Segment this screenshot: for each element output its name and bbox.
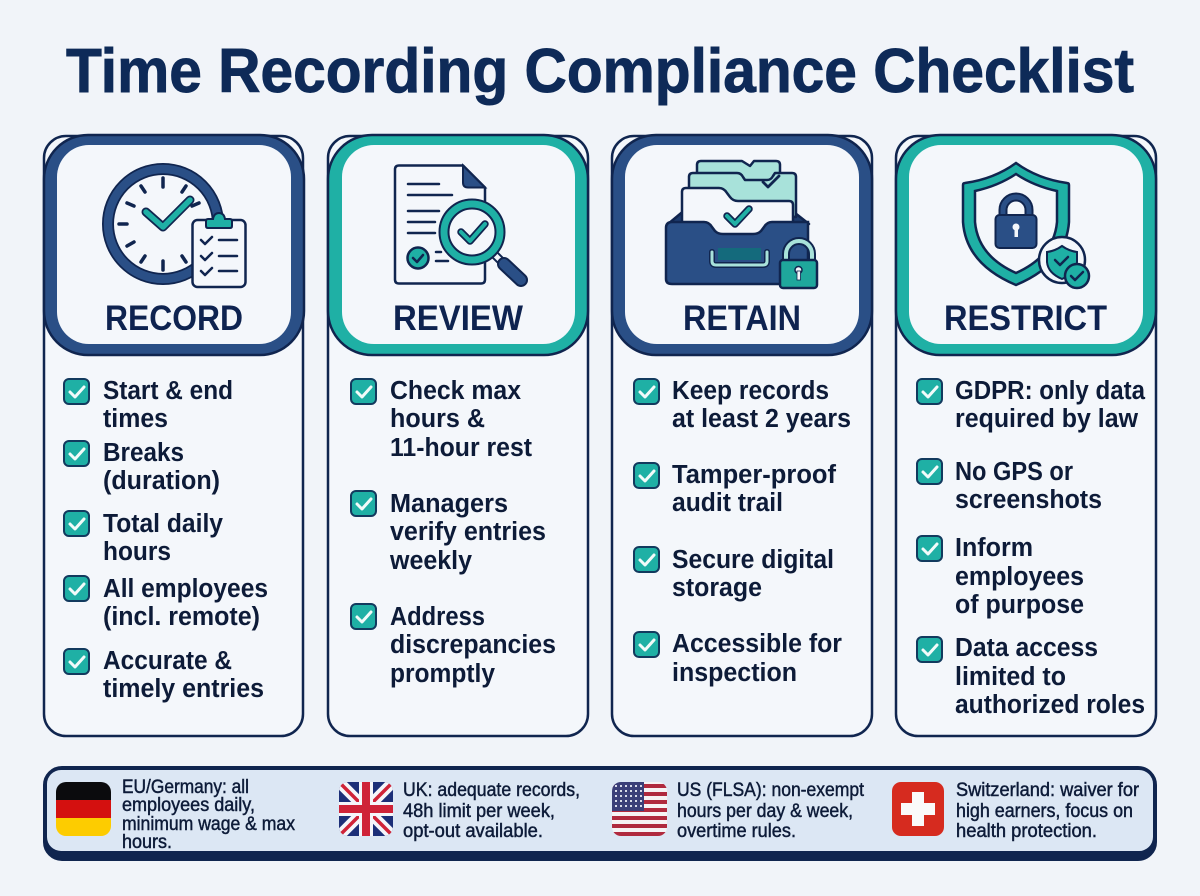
icon: german flag xyxy=(56,782,111,836)
item: inform employees xyxy=(917,534,1084,619)
icon: shield with lock xyxy=(963,163,1089,288)
item: total daily hours: Total daily xyxy=(103,510,224,538)
text: switzerland: Switzerland: waiver for xyxy=(956,780,1140,801)
text: germany xyxy=(122,777,295,853)
item: accessible xyxy=(634,630,842,687)
icon: clock with clipboard xyxy=(108,169,246,287)
header: restrict xyxy=(896,135,1156,355)
heading: retain: RETAIN xyxy=(683,298,801,338)
item: check max hours: hours & xyxy=(390,405,485,433)
item: no gps: screenshots xyxy=(955,486,1102,514)
item: start and end times xyxy=(64,377,233,433)
panel: retain xyxy=(612,135,872,736)
item: managers verify: Managers xyxy=(390,490,508,518)
item: start and end times: Start & end xyxy=(103,377,233,405)
icon: document with magnifier xyxy=(395,166,521,284)
item: managers verify: verify entries xyxy=(390,518,546,546)
item: accurate entries: Accurate & xyxy=(103,647,232,675)
item: all employees xyxy=(64,575,268,631)
text: us: overtime rules. xyxy=(677,821,796,842)
item: inform employees: employees xyxy=(955,563,1084,591)
item: address discrepancies: discrepancies xyxy=(390,631,556,659)
item: inform employees: Inform xyxy=(955,534,1033,562)
item: managers verify: weekly xyxy=(389,547,473,575)
icon: swiss flag xyxy=(892,782,944,836)
panel: jurisdictions footer xyxy=(44,767,1156,860)
text: germany: EU/Germany: all xyxy=(122,777,249,798)
text: us: hours per day & week, xyxy=(677,801,853,822)
item: total daily hours xyxy=(64,510,224,566)
item: keep records: at least 2 years xyxy=(672,405,851,433)
item: check max hours: 11-hour rest xyxy=(390,434,532,462)
item: address discrepancies xyxy=(351,603,556,688)
item: breaks: (duration) xyxy=(103,467,220,495)
text: us: US (FLSA): non-exempt xyxy=(677,780,865,801)
item: data access: limited to xyxy=(955,663,1066,691)
text: us xyxy=(677,780,865,842)
header: retain xyxy=(612,135,872,355)
heading: restrict: RESTRICT xyxy=(944,298,1107,338)
text: uk: opt-out available. xyxy=(403,821,543,842)
text: switzerland: high earners, focus on xyxy=(956,801,1133,822)
icon: file drawer with lock xyxy=(666,161,817,288)
header: review xyxy=(328,135,588,355)
item: audit trail xyxy=(634,461,837,517)
item: audit trail: audit trail xyxy=(672,489,783,517)
item: data access: authorized roles xyxy=(955,691,1145,719)
item: no gps xyxy=(917,458,1102,514)
item: gdpr xyxy=(917,377,1146,433)
header: record xyxy=(44,135,304,355)
item: address discrepancies: Address xyxy=(390,603,485,631)
text: uk: UK: adequate records, xyxy=(403,780,580,801)
heading: record: RECORD xyxy=(105,298,243,338)
item: breaks xyxy=(64,439,220,495)
icon: uk flag xyxy=(339,782,393,836)
item: accurate entries: timely entries xyxy=(103,675,264,703)
item: address discrepancies: promptly xyxy=(390,660,496,688)
item: inform employees: of purpose xyxy=(955,591,1084,619)
item: breaks: Breaks xyxy=(103,439,184,467)
text: germany: minimum wage & max xyxy=(122,814,295,835)
item: check max hours xyxy=(351,377,532,462)
item: audit trail: Tamper-proof xyxy=(672,461,837,489)
item: gdpr: required by law xyxy=(955,405,1138,433)
text: switzerland: health protection. xyxy=(956,821,1097,842)
item: total daily hours: hours xyxy=(103,538,171,566)
item: no gps: No GPS or xyxy=(955,458,1073,486)
item: start and end times: times xyxy=(103,405,168,433)
text: germany: employees daily, xyxy=(122,795,255,816)
item: accurate entries xyxy=(64,647,264,703)
item: secure storage: Secure digital xyxy=(672,546,834,574)
item: managers verify xyxy=(351,490,546,575)
item: secure storage xyxy=(634,546,834,602)
panel: record xyxy=(44,135,304,736)
panel: restrict xyxy=(896,135,1156,736)
heading: review: REVIEW xyxy=(393,298,523,338)
item: all employees: All employees xyxy=(103,575,268,603)
item: data access xyxy=(917,634,1145,719)
text: uk xyxy=(403,780,580,842)
item: data access: Data access xyxy=(955,634,1098,662)
title: Time Recording Compliance Checklist xyxy=(66,37,1134,106)
item: accessible: Accessible for xyxy=(672,630,842,658)
item: secure storage: storage xyxy=(672,574,762,602)
item: check max hours: Check max xyxy=(390,377,521,405)
item: keep records xyxy=(634,377,851,433)
item: gdpr: GDPR: only data xyxy=(955,377,1146,405)
icon: us flag xyxy=(612,782,667,836)
item: keep records: Keep records xyxy=(672,377,829,405)
text: switzerland xyxy=(956,780,1140,842)
text: uk: 48h limit per week, xyxy=(403,801,555,822)
item: accessible: inspection xyxy=(672,659,797,687)
text: germany: hours. xyxy=(122,832,172,853)
panel: review xyxy=(328,135,588,736)
item: all employees: (incl. remote) xyxy=(103,603,260,631)
